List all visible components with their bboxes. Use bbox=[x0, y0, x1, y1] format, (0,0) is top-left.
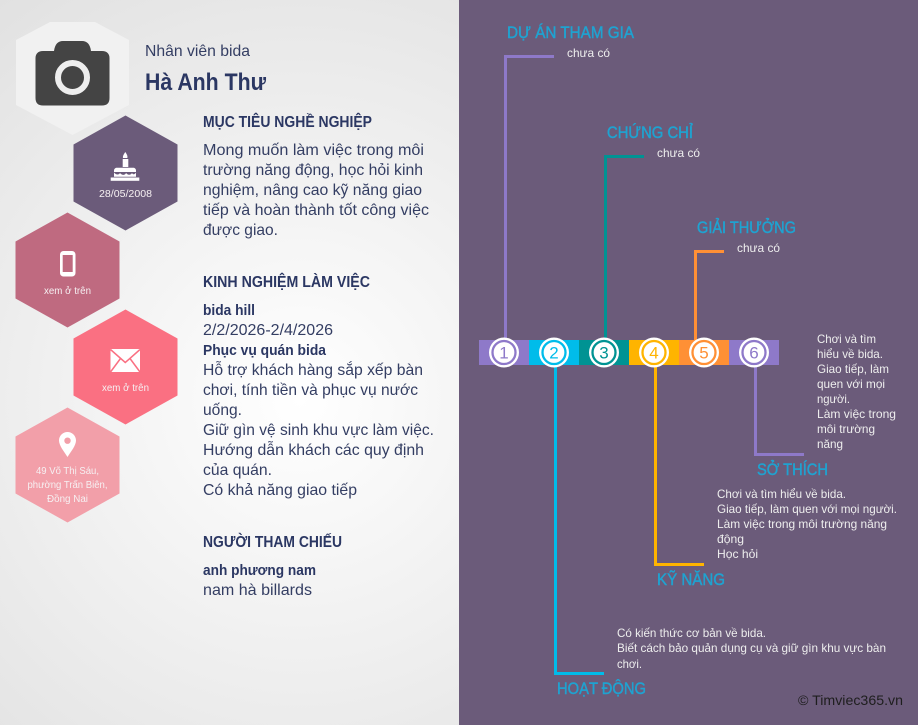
birth date text: 28/05/2008 bbox=[99, 189, 152, 200]
text block: work experience: chơi, tính tiền và phục vụ nước bbox=[203, 382, 418, 399]
heading: activities: HOẠT ĐỘNG bbox=[557, 679, 646, 698]
heading: awards: GIẢI THƯỞNG bbox=[697, 218, 796, 237]
hexagon: address bbox=[16, 408, 120, 522]
text block: career goal bbox=[203, 142, 429, 239]
text block: work experience: Có khả năng giao tiếp bbox=[203, 482, 357, 499]
watermark: © Timviec365.vn bbox=[798, 692, 903, 708]
text: skills: Học hỏi bbox=[717, 547, 758, 561]
marker 6 bbox=[739, 338, 769, 368]
address text: Đồng Nai bbox=[47, 493, 88, 505]
text: projects: chưa có bbox=[567, 46, 610, 60]
connector: hobbies bbox=[756, 365, 804, 454]
connector: certificates bbox=[606, 156, 644, 340]
marker 6: 6 bbox=[749, 344, 759, 362]
text block: work experience: uống. bbox=[203, 402, 242, 419]
heading: references: NGƯỜI THAM CHIẾU bbox=[203, 532, 342, 551]
heading: certificates: CHỨNG CHỈ bbox=[607, 123, 693, 142]
marker 1: 1 bbox=[499, 344, 509, 362]
text: hobbies bbox=[817, 332, 896, 451]
photo placeholder hexagon bbox=[16, 22, 129, 135]
text block: work experience: Giữ gìn vệ sinh khu vực làm việc. bbox=[203, 422, 434, 439]
heading: skills: KỸ NĂNG bbox=[657, 570, 725, 589]
marker 4: 4 bbox=[649, 344, 659, 362]
text: skills: động bbox=[717, 532, 744, 546]
icon: map pin bbox=[59, 432, 76, 457]
text: hobbies: Giao tiếp, làm bbox=[817, 362, 889, 376]
email text: xem ở trên bbox=[102, 382, 149, 394]
text block: work experience: Hỗ trợ khách hàng sắp xếp bàn bbox=[203, 360, 423, 379]
hexagon: email bbox=[74, 310, 178, 424]
marker 4 bbox=[639, 338, 669, 368]
marker 5: 5 bbox=[699, 344, 709, 362]
heading: projects: DỰ ÁN THAM GIA bbox=[507, 23, 635, 42]
icon: phone bbox=[60, 251, 76, 276]
text: hobbies: Làm việc trong bbox=[817, 407, 896, 421]
text: hobbies: hiểu về bida. bbox=[817, 347, 883, 361]
connector: projects bbox=[506, 56, 554, 340]
phone text: xem ở trên bbox=[44, 285, 91, 297]
text block: work experience: Phục vụ quán bida bbox=[203, 342, 327, 359]
text block: work experience: bida hill bbox=[203, 302, 255, 319]
text: skills: Giao tiếp, làm quen với mọi người. bbox=[717, 502, 897, 516]
text block: career goal: tiếp và hoàn thành tốt công việc bbox=[203, 202, 429, 219]
hexagon: birth date bbox=[74, 116, 178, 230]
text: activities: Biết cách bảo quản dụng cụ và giữ gìn khu vực bàn bbox=[617, 641, 886, 655]
text block: work experience: của quán. bbox=[203, 462, 272, 479]
address text bbox=[28, 466, 108, 505]
text: hobbies: năng bbox=[817, 437, 843, 451]
icon: birthday cake bbox=[111, 152, 139, 181]
text: activities: chơi. bbox=[617, 657, 642, 671]
text: awards: chưa có bbox=[737, 241, 780, 255]
address text: 49 Võ Thị Sáu, bbox=[36, 466, 99, 477]
text block: references: anh phương nam bbox=[203, 562, 316, 579]
text block: references: nam hà billards bbox=[203, 582, 312, 599]
text block: work experience bbox=[203, 302, 434, 499]
text: hobbies: Chơi và tìm bbox=[817, 332, 876, 346]
candidate name: Hà Anh Thư bbox=[145, 69, 267, 96]
text: skills bbox=[717, 487, 897, 561]
icon: envelope bbox=[110, 349, 140, 372]
text block: career goal: trường năng động, học hỏi kinh bbox=[203, 162, 423, 179]
text block: career goal: được giao. bbox=[203, 222, 278, 239]
text: activities bbox=[617, 626, 886, 671]
icon: camera bbox=[36, 41, 110, 106]
panel: right background bbox=[459, 0, 918, 725]
text: hobbies: môi trường bbox=[817, 422, 875, 436]
marker 2: 2 bbox=[549, 344, 559, 362]
heading: career goal: MỤC TIÊU NGHỀ NGHIỆP bbox=[203, 112, 372, 131]
hexagon: phone bbox=[16, 212, 120, 328]
marker 3: 3 bbox=[599, 344, 609, 362]
text block: work experience: 2/2/2026-2/4/2026 bbox=[203, 322, 333, 339]
text: hobbies: quen với mọi bbox=[817, 377, 885, 391]
text: activities: Có kiến thức cơ bản về bida. bbox=[617, 626, 766, 640]
timeline bar bbox=[479, 338, 779, 368]
text: skills: Chơi và tìm hiểu về bida. bbox=[717, 487, 846, 501]
panel: left background bbox=[0, 0, 459, 725]
text block: work experience: Hướng dẫn khách các quy định bbox=[203, 440, 424, 459]
connector: activities bbox=[556, 365, 604, 674]
connector: skills bbox=[656, 365, 704, 564]
heading: work experience: KINH NGHIỆM LÀM VIỆC bbox=[203, 272, 370, 291]
marker 3 bbox=[589, 338, 619, 368]
marker 1 bbox=[489, 338, 519, 368]
text: hobbies: người. bbox=[817, 392, 850, 406]
connector: awards bbox=[696, 252, 724, 340]
marker 2 bbox=[539, 338, 569, 368]
text block: career goal: nghiệm, nâng cao kỹ năng giao bbox=[203, 182, 422, 199]
text: skills: Làm việc trong môi trường năng bbox=[717, 517, 887, 531]
job title: Nhân viên bida bbox=[145, 43, 250, 60]
marker 5 bbox=[689, 338, 719, 368]
text block: references bbox=[203, 562, 316, 599]
text: certificates: chưa có bbox=[657, 146, 700, 160]
text block: career goal: Mong muốn làm việc trong môi bbox=[203, 142, 424, 159]
address text: phường Trấn Biên, bbox=[28, 479, 108, 491]
heading: hobbies: SỞ THÍCH bbox=[757, 460, 828, 479]
